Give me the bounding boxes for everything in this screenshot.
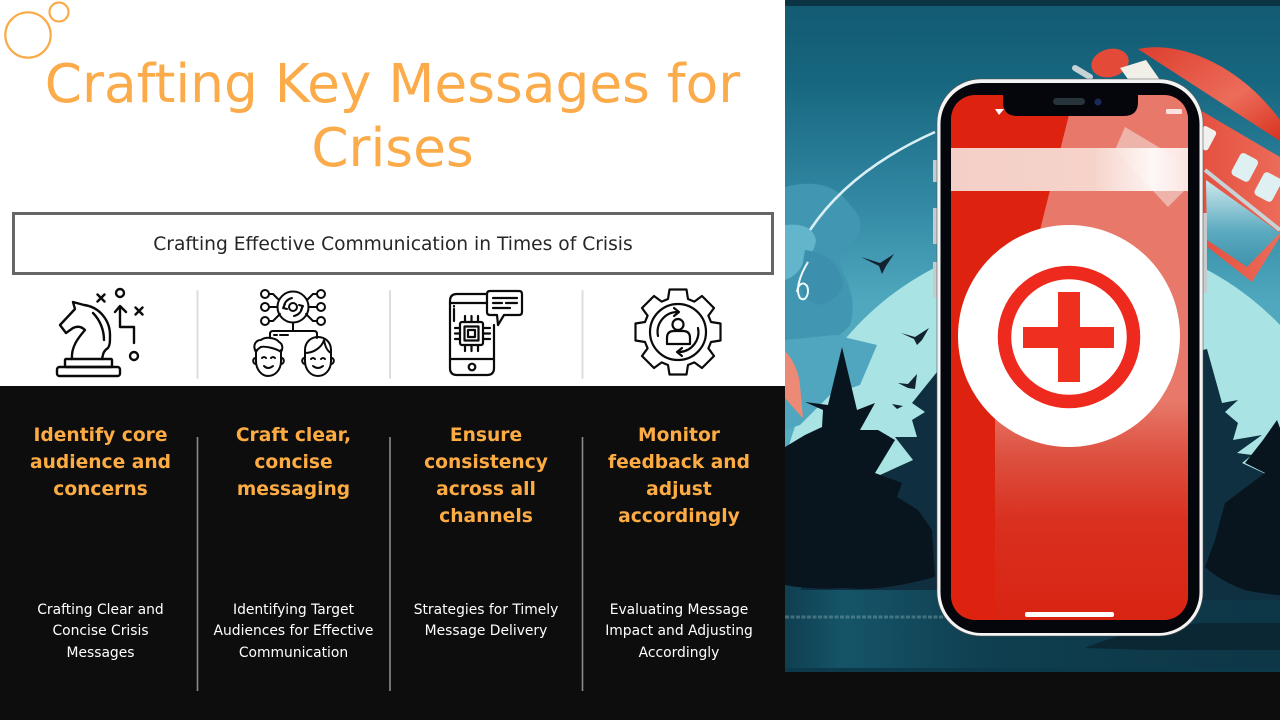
- doodle loop: [797, 262, 808, 299]
- pale hill: [785, 235, 1280, 672]
- step 2 description: [214, 602, 373, 661]
- step 4 heading: adjust: [646, 478, 712, 500]
- step 2 heading: Craft clear,: [236, 424, 351, 446]
- step 1 description: Concise Crisis: [52, 623, 149, 639]
- white circle badge: [958, 225, 1180, 447]
- step 1 heading: concerns: [53, 478, 148, 500]
- step 3 description: [414, 602, 558, 639]
- step 1 description: Crafting Clear and: [37, 602, 164, 618]
- phone screen: [951, 95, 1188, 620]
- step 4 description: Accordingly: [639, 645, 719, 661]
- step 4 heading: feedback and: [608, 452, 750, 472]
- step 3 heading: channels: [439, 506, 533, 526]
- step 1 heading: Identify core: [33, 424, 168, 446]
- ground: [785, 585, 1280, 672]
- trees: [785, 347, 1280, 600]
- notch: [995, 95, 1182, 116]
- phone body: [933, 79, 1207, 636]
- step 1 description: [37, 602, 164, 661]
- step 1 heading: [30, 424, 171, 500]
- step 3 description: Message Delivery: [425, 623, 547, 639]
- step 1 heading: audience and: [30, 452, 171, 472]
- icon row: [56, 288, 722, 379]
- step 4 heading: accordingly: [618, 506, 740, 526]
- sky background: [785, 0, 1280, 672]
- birds: [861, 254, 929, 409]
- icon: smartphone with chip and chat bubble: [450, 291, 522, 375]
- step 4 description: [605, 602, 753, 661]
- step 4 description: Evaluating Message: [610, 602, 748, 618]
- icon: network and audience faces: [253, 290, 334, 376]
- step 1 description: Messages: [67, 645, 134, 661]
- left salmon object: [785, 351, 803, 418]
- step 3 heading: Ensure: [450, 424, 522, 446]
- illustration: smartphone with medical cross: [785, 0, 1280, 672]
- subtitle banner: [12, 212, 774, 275]
- step 4 heading: [608, 424, 750, 526]
- step 3 heading: consistency: [424, 452, 548, 472]
- dark lower panel: [0, 386, 1280, 720]
- step 2 description: Communication: [239, 645, 348, 661]
- step 3 heading: [424, 424, 548, 526]
- step 4 description: Impact and Adjusting: [605, 623, 753, 639]
- step 2 description: Audiences for Effective: [214, 623, 373, 639]
- medical ring: [1004, 272, 1134, 402]
- title: [45, 52, 740, 179]
- step 2 heading: concise: [254, 452, 333, 472]
- step 3 heading: across all: [436, 478, 536, 500]
- clouds: [785, 184, 877, 430]
- decorative circles: [4, 1, 70, 59]
- step 2 heading: [236, 424, 351, 500]
- home indicator: [1025, 612, 1114, 617]
- step 4 heading: Monitor: [638, 424, 720, 446]
- step 3 description: Strategies for Timely: [414, 602, 558, 618]
- column separators: [196, 437, 584, 691]
- medical cross: [1023, 292, 1114, 382]
- subtitle banner: Crafting Effective Communication in Times of Crisis: [153, 234, 633, 255]
- title: Crises: [311, 116, 474, 179]
- satellite: [1075, 45, 1280, 282]
- step 2 heading: messaging: [237, 478, 350, 500]
- title: Crafting Key Messages for: [45, 52, 740, 115]
- step 2 description: Identifying Target: [233, 602, 354, 618]
- icon: chess knight strategy: [57, 289, 142, 376]
- icon: gear with person: [636, 290, 720, 374]
- orbit arc: [810, 132, 935, 230]
